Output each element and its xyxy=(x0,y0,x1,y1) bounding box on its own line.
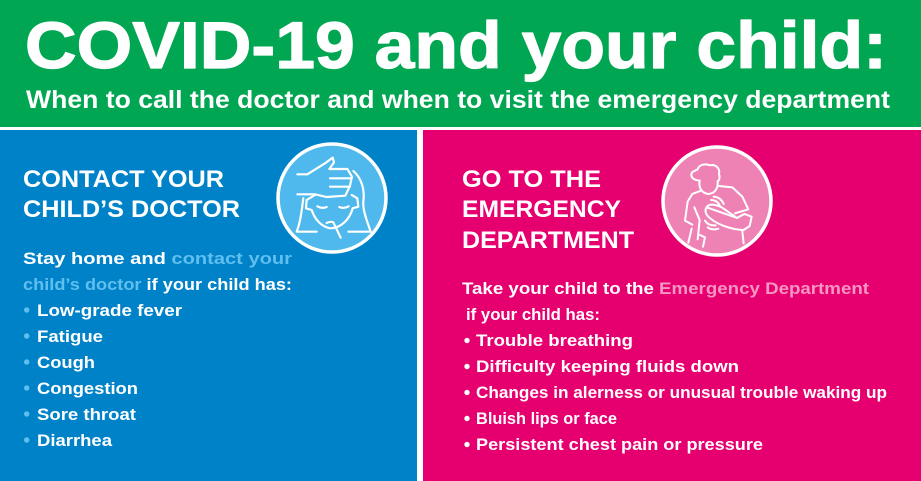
heading: emergency department xyxy=(462,166,634,254)
title: COVID-19 and your child: xyxy=(25,8,887,82)
symptom list: emergency: Changes in alerness or unusual trouble waking up xyxy=(476,383,887,402)
symptom list: doctor: Congestion xyxy=(37,379,138,398)
panel: go to the emergency department xyxy=(423,130,921,481)
intro text: emergency: if your child has: xyxy=(466,305,600,324)
subtitle: When to call the doctor and when to visit the emergency department xyxy=(26,86,891,114)
symptom list: emergency xyxy=(464,331,887,454)
panel: contact your child's doctor xyxy=(0,130,417,481)
symptom list: doctor xyxy=(24,301,182,450)
heading: contact doctor xyxy=(23,166,240,223)
heading: emergency department: GO TO THE xyxy=(462,166,601,193)
symptom list: doctor: Sore throat xyxy=(37,405,136,424)
intro text: doctor xyxy=(23,249,292,294)
intro text: doctor: child’s doctor if your child has: xyxy=(23,275,292,294)
panel: header banner xyxy=(0,0,921,127)
icon: person holding chest xyxy=(663,147,771,255)
symptom list: doctor: Fatigue xyxy=(37,327,103,346)
symptom list: doctor: Cough xyxy=(37,353,95,372)
symptom list: emergency: Bluish lips or face xyxy=(476,409,617,428)
symptom list: doctor: Diarrhea xyxy=(37,431,113,450)
symptom list: doctor: Low-grade fever xyxy=(37,301,182,320)
heading: contact doctor: CHILD’S DOCTOR xyxy=(23,196,240,223)
heading: contact doctor: CONTACT YOUR xyxy=(23,166,224,193)
symptom list: emergency: Difficulty keeping fluids down xyxy=(476,357,739,376)
intro text: doctor: Stay home and contact your xyxy=(23,249,292,268)
symptom list: emergency: Trouble breathing xyxy=(476,331,633,350)
intro text: emergency xyxy=(462,279,869,324)
icon: hand on child's forehead xyxy=(278,144,386,252)
heading: emergency department: EMERGENCY xyxy=(462,196,621,223)
intro text: emergency: Take your child to the Emergency Department xyxy=(462,279,869,298)
heading: emergency department: DEPARTMENT xyxy=(462,227,634,254)
symptom list: emergency: Persistent chest pain or pressure xyxy=(476,435,763,454)
